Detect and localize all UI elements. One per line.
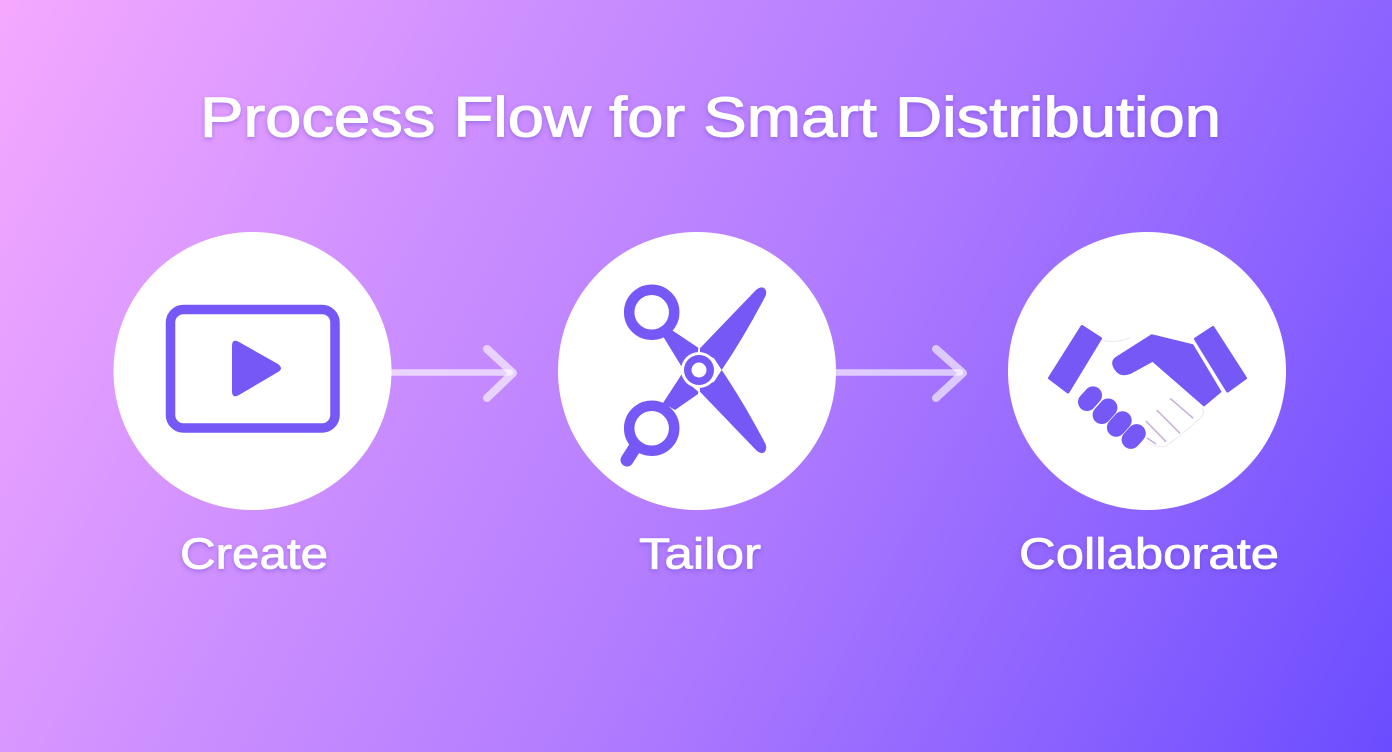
icon: video play xyxy=(170,310,335,428)
label: collaborate: Collaborate xyxy=(1019,530,1279,578)
circle: tailor xyxy=(558,232,836,510)
label: create: Create xyxy=(180,530,328,578)
label: tailor: Tailor xyxy=(639,530,761,578)
icon: scissors xyxy=(627,287,766,460)
step 1: create xyxy=(114,232,392,578)
step 2: tailor xyxy=(558,232,836,578)
title: Process Flow for Smart Distribution xyxy=(200,86,1221,150)
icon: handshake xyxy=(1050,326,1246,453)
arrow: create to tailor xyxy=(391,349,513,398)
circle: collaborate xyxy=(1008,232,1286,510)
arrow: tailor to collaborate xyxy=(836,349,963,398)
circle: create xyxy=(114,232,392,510)
step 3: collaborate xyxy=(1008,232,1286,578)
